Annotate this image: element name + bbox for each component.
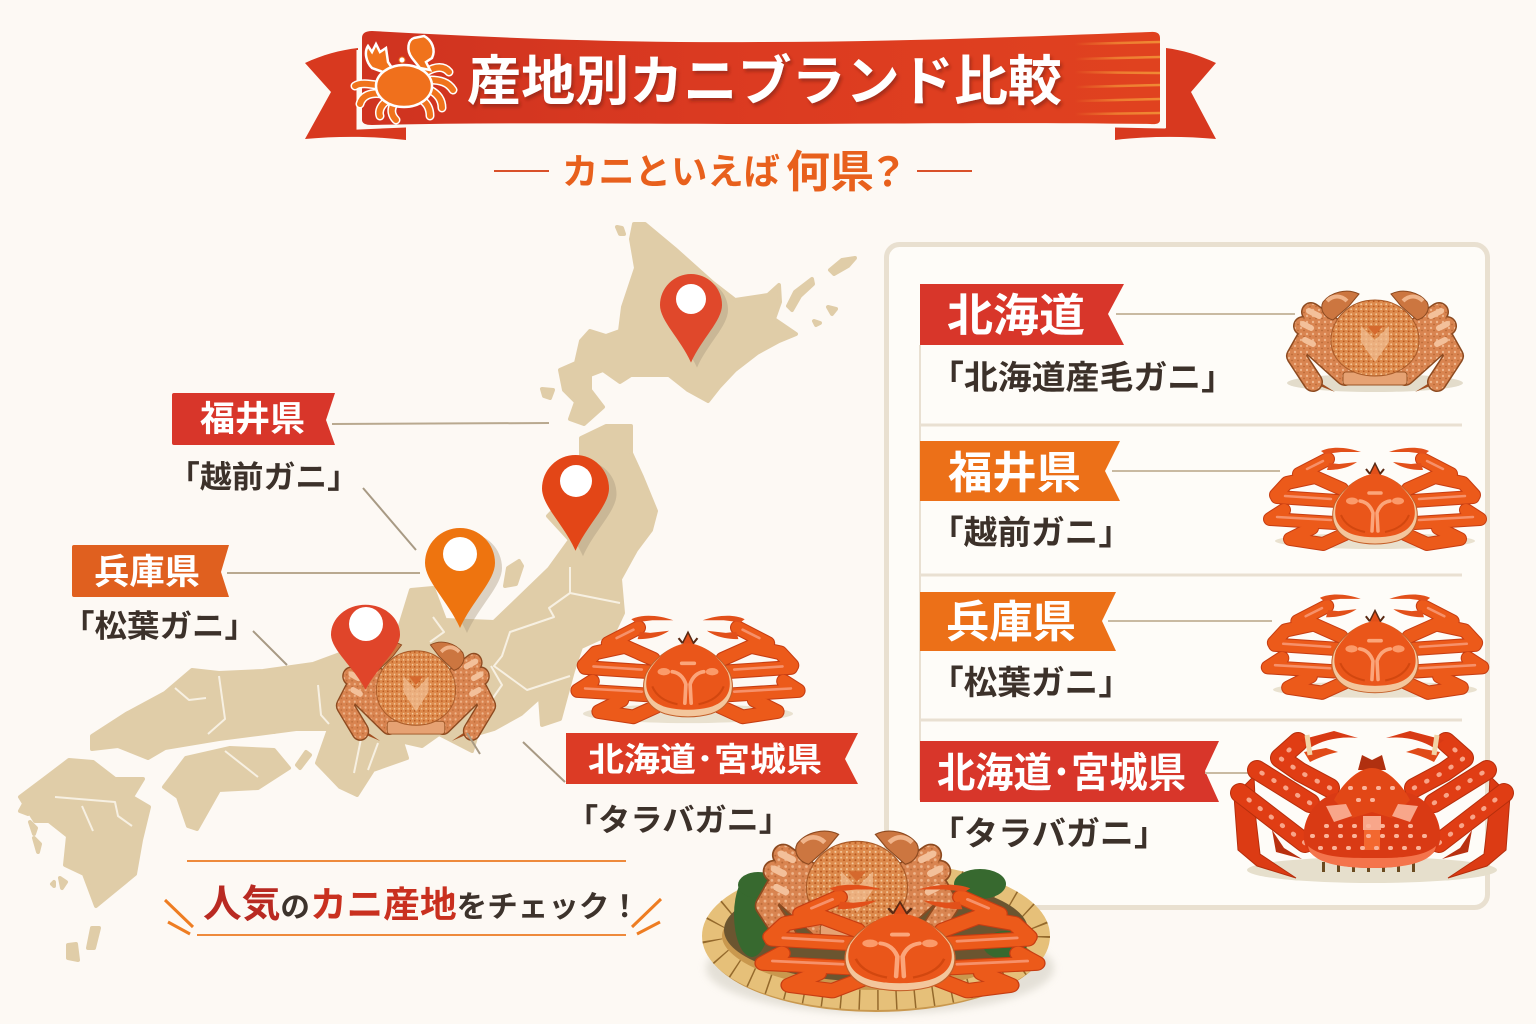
hairy crab <box>1287 291 1463 392</box>
badge <box>920 741 1219 802</box>
brand name: 「越前ガニ」 <box>168 460 359 495</box>
ribbon band <box>362 31 1160 125</box>
snow crab <box>1270 448 1480 549</box>
map pin: Hyogo <box>331 605 400 690</box>
hairy crab on map <box>345 642 487 741</box>
badge <box>72 545 229 597</box>
Shikoku <box>164 748 289 829</box>
map of Japan <box>20 224 855 960</box>
row: Hokkaido and Miyagi <box>920 741 1252 852</box>
map pin: Hokkaido <box>660 274 728 368</box>
subtitle: ？ <box>868 151 908 195</box>
badge text: 北海道 <box>947 290 1085 341</box>
pointer line <box>253 631 287 665</box>
badge text: 福井県 <box>948 449 1081 498</box>
panel frame <box>886 244 1488 908</box>
map pin: Miyagi area <box>542 455 616 556</box>
Hokkaido <box>560 224 796 424</box>
ribbon streaks <box>1072 42 1160 114</box>
brand name: 「越前ガニ」 <box>930 514 1132 551</box>
rail <box>919 345 921 800</box>
leader line <box>332 423 549 424</box>
label: Hyogo <box>62 545 420 665</box>
icon: crab <box>355 36 453 120</box>
prefecture lines <box>55 567 620 831</box>
brand name: 「松葉ガニ」 <box>930 664 1132 701</box>
brand name: 「タラバガニ」 <box>566 803 791 838</box>
map pin: Fukui <box>425 528 502 633</box>
callout: check popular crab regions <box>165 861 661 935</box>
badge <box>920 441 1120 501</box>
label: Fukui <box>168 393 549 550</box>
snow crab <box>1268 595 1482 698</box>
line <box>1112 470 1280 472</box>
line <box>1116 313 1295 315</box>
pointer lines <box>467 733 565 782</box>
ribbon outline <box>358 48 1164 128</box>
basket shadow <box>706 922 1054 1014</box>
subtitle: 何県 <box>786 148 874 197</box>
snow crab in basket <box>764 885 1036 991</box>
badge text: 北海道･宮城県 <box>588 741 822 778</box>
subtitle <box>494 148 972 197</box>
badge text: 兵庫県 <box>946 598 1076 647</box>
badge text: 北海道･宮城県 <box>937 750 1186 796</box>
title text: 産地別カニブランド比較 <box>467 52 1062 112</box>
islands <box>20 227 855 960</box>
greens <box>734 869 1027 959</box>
basket body <box>705 870 1047 1012</box>
leader line <box>227 572 420 574</box>
badge <box>920 592 1116 651</box>
hairy crab in basket <box>766 831 948 947</box>
callout: check popular crab regions: 人気のカニ産地をチェック！ <box>203 884 640 926</box>
badge <box>920 284 1124 345</box>
Kyushu <box>20 760 149 906</box>
pointer line <box>363 488 416 550</box>
row: Hokkaido <box>920 284 1463 396</box>
dividers <box>921 425 1462 720</box>
snow crab beside map <box>578 616 798 723</box>
row: Fukui <box>920 441 1480 551</box>
badge text: 兵庫県 <box>94 553 200 592</box>
badge text: 福井県 <box>200 400 305 439</box>
Honshu <box>92 426 656 795</box>
panel: brand list <box>886 244 1488 908</box>
row: Hyogo <box>920 592 1482 701</box>
title ribbon <box>305 31 1216 140</box>
line <box>1205 772 1252 774</box>
ribbon left tail <box>305 48 406 140</box>
brand name: 「松葉ガニ」 <box>62 609 257 644</box>
brand name: 「北海道産毛ガニ」 <box>930 359 1235 396</box>
king crab <box>1234 731 1510 883</box>
line <box>1108 620 1272 622</box>
badge <box>172 393 335 445</box>
badge <box>566 733 858 784</box>
subtitle: カニといえば <box>562 151 780 192</box>
ribbon right tail <box>1115 48 1216 140</box>
label: Hokkaido and Miyagi <box>467 733 858 838</box>
basket of crabs <box>705 831 1054 1014</box>
brand name: 「タラバガニ」 <box>930 815 1168 852</box>
